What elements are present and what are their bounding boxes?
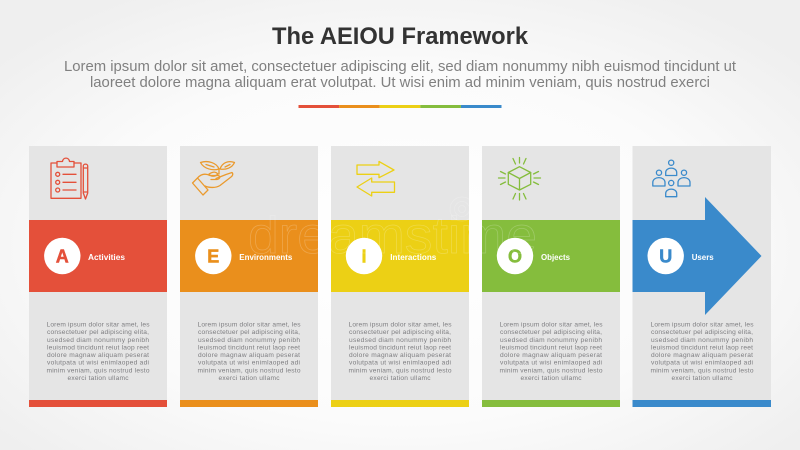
arrow band: [632, 197, 762, 315]
body text: exerci tation ullamc: [370, 375, 431, 382]
icon: exchange arrows: [357, 162, 394, 196]
body text: minim veniam, quis nostrud lesto: [650, 367, 754, 374]
letter badge A: [44, 238, 80, 274]
body text: leuismod tincidunt reiut laop reet: [198, 344, 300, 351]
body text: [500, 322, 603, 382]
body text: consectetuer pel adipiscing elita,: [500, 329, 602, 336]
icon: glowing cube: [498, 158, 540, 200]
label: Users: [692, 253, 714, 262]
letter badge O: [497, 238, 533, 274]
body text: usedsed diam nonummy penibh: [500, 337, 602, 344]
panel: Activities: [29, 146, 167, 407]
label: Interactions: [390, 253, 437, 262]
body text: Lorem ipsum dolor sitar amet, les: [46, 322, 150, 328]
body text: leuismod tincidunt reiut laop reet: [500, 344, 602, 351]
panel: Objects: [482, 146, 620, 407]
body text: exerci tation ullamc: [672, 375, 733, 382]
body text: dolore magnaw aliquam peserat: [349, 352, 451, 359]
body text: [650, 322, 754, 382]
subtitle text: laoreet dolore magna aliquam erat volutpat. Ut wisi enim ad minim veniam, quis nostrud exerci: [90, 75, 710, 91]
letter badge E: [195, 238, 232, 274]
body text: consectetuer pel adipiscing elita,: [47, 329, 149, 336]
body text: leuismod tincidunt reiut laop reet: [651, 344, 753, 351]
bottom accent bar: [29, 400, 167, 407]
panel: Users: [632, 146, 771, 407]
body text: exerci tation ullamc: [218, 375, 280, 382]
body text: [348, 322, 452, 382]
bottom accent bar: [632, 400, 771, 407]
body text: usedsed diam nonummy penibh: [651, 337, 753, 344]
body text: usedsed diam nonummy penibh: [198, 337, 300, 344]
body text: dolore magnaw aliquam peserat: [198, 352, 300, 359]
icon: clipboard and pencil: [51, 158, 88, 199]
letter badge U: U: [659, 246, 672, 266]
body text: minim veniam, quis nostrud lesto: [46, 367, 150, 374]
bottom accent bar: [331, 400, 469, 407]
panel: Environments: [180, 146, 318, 407]
icon: group of people: [653, 160, 690, 197]
letter badge A: A: [56, 246, 69, 266]
body text: leuismod tincidunt reiut laop reet: [47, 344, 149, 351]
body text: minim veniam, quis nostrud lesto: [348, 367, 452, 374]
body text: leuismod tincidunt reiut laop reet: [349, 344, 451, 351]
colour band: [29, 220, 167, 292]
label: Activities: [88, 253, 126, 262]
bottom accent bar: [482, 400, 620, 407]
letter badge I: I: [361, 246, 367, 266]
body text: volutpata ut wisi enimlaoped adi: [47, 360, 150, 367]
label: Objects: [541, 253, 571, 262]
body text: minim veniam, quis nostrud lesto: [500, 367, 603, 374]
body text: volutpata ut wisi enimlaoped adi: [651, 360, 754, 367]
body text: consectetuer pel adipiscing elita,: [198, 329, 300, 336]
body text: Lorem ipsum dolor sitar amet, les: [650, 322, 754, 328]
body text: consectetuer pel adipiscing elita,: [651, 329, 753, 336]
panel: Interactions: [331, 146, 469, 407]
body text: Lorem ipsum dolor sitar amet, les: [500, 322, 603, 328]
label: Environments: [239, 253, 293, 262]
body text: dolore magnaw aliquam peserat: [500, 352, 602, 359]
body text: Lorem ipsum dolor sitar amet, les: [348, 322, 452, 328]
rainbow divider: [298, 105, 502, 108]
watermark: dreamstime: [248, 207, 537, 265]
subtitle text: Lorem ipsum dolor sit amet, consectetuer adipiscing elit, sed diam nonummy nibh euismod tincidunt ut: [64, 59, 736, 75]
body text: exerci tation ullamc: [68, 375, 129, 382]
body text: volutpata ut wisi enimlaoped adi: [198, 360, 301, 367]
colour band: [482, 220, 620, 292]
colour band: [331, 220, 469, 292]
body text: exerci tation ullamc: [520, 375, 582, 382]
body text: volutpata ut wisi enimlaoped adi: [349, 360, 452, 367]
colour band: [180, 220, 318, 292]
icon: hand holding plant: [192, 162, 234, 195]
body text: dolore magnaw aliquam peserat: [651, 352, 753, 359]
subtitle text: [64, 59, 736, 91]
title: The AEIOU Framework: [272, 23, 529, 50]
letter badge U: [648, 238, 684, 274]
body text: minim veniam, quis nostrud lesto: [198, 367, 301, 374]
body text: Lorem ipsum dolor sitar amet, les: [198, 322, 301, 328]
letter badge O: O: [508, 246, 522, 266]
body text: volutpata ut wisi enimlaoped adi: [500, 360, 603, 367]
bottom accent bar: [180, 400, 318, 407]
body text: dolore magnaw aliquam peserat: [47, 352, 149, 359]
letter badge I: [346, 238, 382, 274]
body text: usedsed diam nonummy penibh: [47, 337, 149, 344]
body text: usedsed diam nonummy penibh: [349, 337, 451, 344]
body text: [46, 322, 150, 382]
body text: consectetuer pel adipiscing elita,: [349, 329, 451, 336]
body text: [198, 322, 301, 382]
letter badge E: E: [207, 246, 219, 266]
